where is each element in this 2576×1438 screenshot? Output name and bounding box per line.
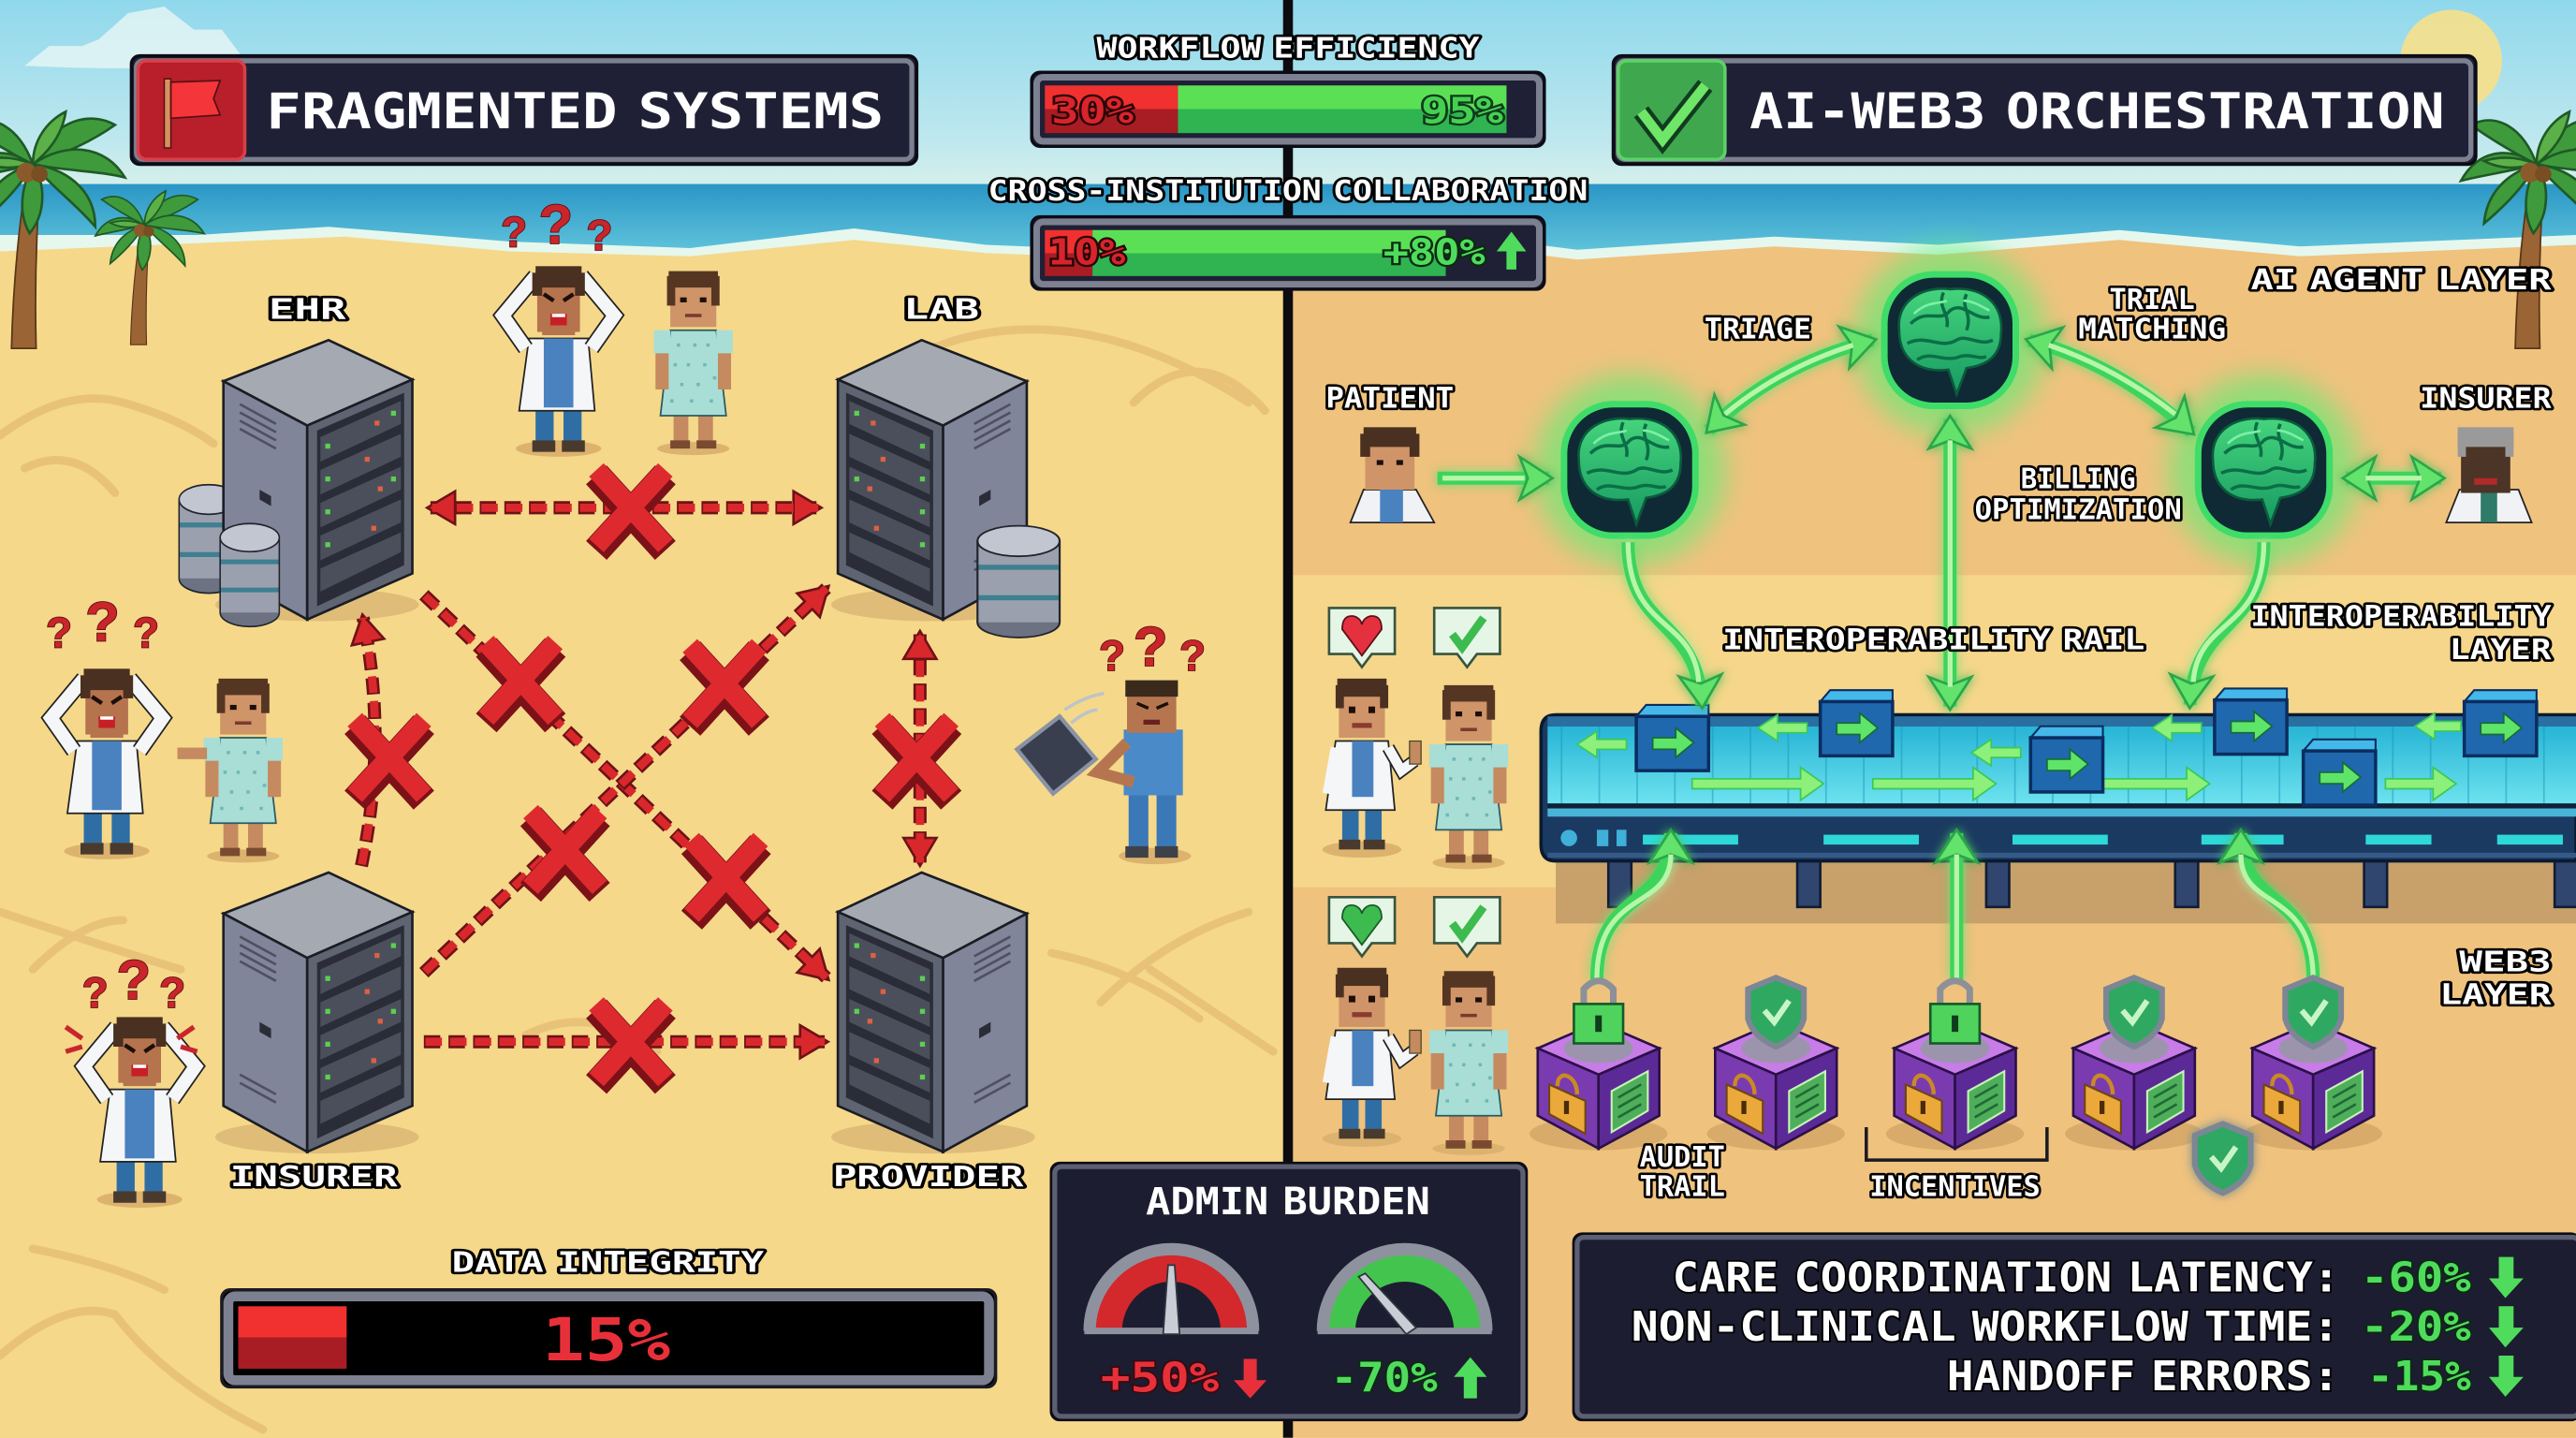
- arrows: Web3 to rail: [1597, 833, 2313, 979]
- right side labels: INTEROPERABILITY RAIL: [1722, 624, 2144, 656]
- data packets: [1636, 688, 2537, 805]
- right side labels: TRIAGE: [1705, 314, 1811, 346]
- person: insurer portrait: [2446, 427, 2532, 522]
- panel: fragmented systems header: FRAGMENTED SYSTEMS: [266, 83, 884, 140]
- panel: outcome metrics: -15%: [2367, 1353, 2471, 1401]
- right side labels: TRIAL: [2110, 284, 2195, 316]
- metric: workflow efficiency: [1032, 32, 1544, 146]
- icons: locks and shields: [1573, 977, 2341, 1193]
- question marks: [46, 590, 159, 657]
- gauge: before: [1084, 1251, 1258, 1334]
- metric: cross-institution collaboration: CROSS-INSTITUTION COLLABORATION: [988, 175, 1588, 208]
- question marks: [501, 193, 612, 259]
- bracket: incentives: [1866, 1127, 2047, 1160]
- metric: data integrity: [222, 1246, 996, 1387]
- palm tree: right: [2461, 111, 2576, 348]
- belt arrows: [1577, 713, 2461, 800]
- gauge: after: [1318, 1251, 1492, 1334]
- palm tree: left large: [0, 111, 124, 348]
- panel: outcome metrics: -20%: [2361, 1303, 2471, 1351]
- question marks: ?: [117, 948, 151, 1011]
- right sand: [1288, 240, 2576, 1438]
- people: satisfied doctor and patient, lower: [1323, 897, 1508, 1155]
- metric: data integrity: 15%: [542, 1305, 670, 1374]
- question marks: ?: [587, 212, 612, 259]
- panel: outcome metrics: NON-CLINICAL WORKFLOW TIME:: [1632, 1303, 2339, 1351]
- right side labels: AI AGENT LAYER: [2250, 264, 2552, 297]
- background: sky, sea and beach: [0, 0, 2576, 191]
- right side labels: WEB3: [2459, 946, 2552, 978]
- panel: admin burden: -70%: [1331, 1355, 1438, 1402]
- metric: workflow efficiency: WORKFLOW EFFICIENCY: [1097, 32, 1480, 65]
- question marks: ?: [501, 208, 527, 256]
- person: staff dropping tablet: [1017, 615, 1206, 864]
- metric: data integrity: DATA INTEGRITY: [452, 1246, 764, 1279]
- server: provider: PROVIDER: [833, 1161, 1023, 1194]
- metric: cross-institution collaboration: [988, 175, 1588, 289]
- person: patient portrait: [1351, 427, 1434, 522]
- panel: AI-Web3 orchestration header: AI-WEB3 ORCHESTRATION: [1749, 83, 2445, 140]
- right side labels: PATIENT: [1325, 382, 1454, 415]
- speech bubble: green heart: [1329, 897, 1395, 956]
- interoperability rail conveyor: [1541, 688, 2576, 907]
- question marks: ?: [1134, 615, 1167, 678]
- sea: [0, 184, 2576, 263]
- people: satisfied doctor and patient, upper: [1323, 608, 1508, 869]
- sand dunes: [0, 330, 1273, 1430]
- cloud: [24, 7, 246, 68]
- icon: red flag: [138, 61, 245, 159]
- right side labels: [1325, 264, 2552, 1204]
- server: insurer: [215, 873, 419, 1194]
- server: EHR: EHR: [269, 293, 346, 326]
- people: frustrated doctor and patient, left: [46, 590, 283, 862]
- question marks: ?: [1099, 632, 1125, 680]
- right side labels: INSURER: [2420, 382, 2552, 415]
- sun: [2400, 10, 2502, 111]
- icon: brain agent, triage: [1534, 374, 1725, 565]
- panel: outcome metrics: CARE COORDINATION LATENCY:: [1673, 1255, 2339, 1302]
- right side labels: TRAIL: [1640, 1171, 1725, 1204]
- question marks: ?: [133, 609, 159, 657]
- metric: cross-institution collaboration: +80%: [1383, 232, 1486, 274]
- icon: green check: [1618, 61, 1725, 159]
- people: frustrated doctor and patient, top: [501, 193, 733, 457]
- panel: admin burden: ADMIN BURDEN: [1146, 1180, 1430, 1224]
- question marks: ?: [539, 193, 573, 256]
- icon: tablet: [1017, 716, 1096, 794]
- server: insurer: INSURER: [230, 1161, 398, 1194]
- right side labels: MATCHING: [2078, 314, 2226, 346]
- chain arrows: [1658, 1082, 2250, 1090]
- right side labels: LAYER: [2450, 634, 2552, 667]
- panel: fragmented systems header: [131, 56, 916, 165]
- arrows: broken links between systems: [361, 507, 920, 1042]
- icon: brain agent, billing: [2169, 374, 2359, 565]
- panel: AI-Web3 orchestration header: [1614, 56, 2476, 165]
- metric: workflow efficiency: 95%: [1421, 91, 1503, 133]
- question marks: ?: [1179, 632, 1206, 680]
- speech bubble: green check: [1434, 897, 1500, 956]
- panel: admin burden: [1051, 1164, 1526, 1419]
- web3 blockchain blocks: [1530, 977, 2382, 1193]
- panel: admin burden: +50%: [1101, 1355, 1220, 1402]
- server: provider: [831, 873, 1035, 1194]
- right side labels: OPTIMIZATION: [1975, 494, 2182, 527]
- arrows: AI agent flows: [1438, 340, 2441, 707]
- question marks: [82, 948, 185, 1017]
- metric: workflow efficiency: 30%: [1051, 91, 1134, 133]
- panel: outcome metrics: -60%: [2361, 1255, 2471, 1302]
- person: furious doctor, bottom left: [66, 948, 198, 1208]
- red X marks: [355, 470, 951, 1084]
- right side labels: AUDIT: [1640, 1141, 1725, 1174]
- question marks: ?: [46, 609, 72, 657]
- panel: outcome metrics: HANDOFF ERRORS:: [1947, 1353, 2339, 1401]
- left sand: [0, 237, 1288, 1438]
- server: EHR: [179, 293, 419, 626]
- speech bubble: heart: [1329, 608, 1395, 668]
- right side labels: LAYER: [2439, 978, 2552, 1011]
- question marks: ?: [159, 969, 185, 1017]
- question marks: ?: [85, 590, 120, 653]
- right side labels: INTEROPERABILITY: [2250, 601, 2552, 634]
- right side labels: BILLING: [2021, 462, 2136, 495]
- server: LAB: [831, 293, 1060, 638]
- right side labels: INCENTIVES: [1869, 1171, 2041, 1204]
- speech bubble: check: [1434, 608, 1500, 668]
- centre divider: [1283, 0, 1293, 1438]
- palm tree: left small: [95, 191, 204, 345]
- question marks: [1099, 615, 1206, 680]
- metric: cross-institution collaboration: 10%: [1048, 232, 1125, 274]
- icon: brain agent, trial matching: [1855, 245, 2045, 435]
- panel: outcome metrics: [1573, 1234, 2576, 1419]
- server: LAB: LAB: [903, 293, 979, 326]
- question marks: ?: [82, 969, 109, 1017]
